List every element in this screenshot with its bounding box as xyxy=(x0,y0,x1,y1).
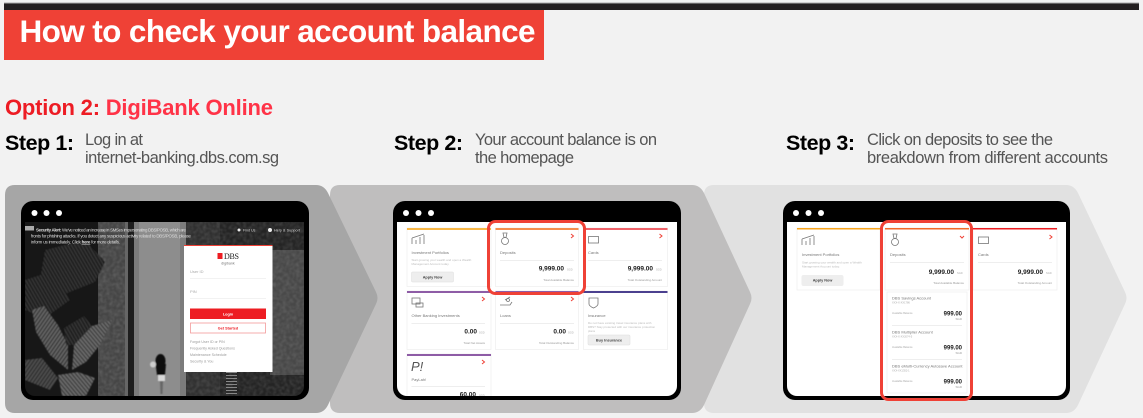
card: cards xyxy=(973,228,1057,290)
card: deposits: Deposits xyxy=(500,250,516,255)
card: deposits: 9,999.00 xyxy=(929,269,954,276)
card: loans: 0.00 xyxy=(553,328,566,336)
account: savings: SGD xyxy=(955,317,963,321)
security alert text: inform us immediately. Click here for more details. xyxy=(31,240,120,244)
step 1 label and text xyxy=(5,131,279,167)
card: deposits: Total Available Balance xyxy=(933,281,964,285)
login card: DBS xyxy=(224,252,239,261)
login card: Forgot User ID or PIN xyxy=(190,340,225,344)
card: paylah: P! xyxy=(411,359,424,374)
device 2: homepage xyxy=(393,201,681,404)
account: multi-currency: 999.00 xyxy=(944,380,963,386)
step 3 label and text: breakdown from different accounts xyxy=(867,149,1108,167)
card: insurance xyxy=(584,291,668,350)
step 1 label and text: internet-banking.dbs.com.sg xyxy=(85,149,279,167)
security alert text: Help & Support xyxy=(274,228,300,232)
highlight: deposits xyxy=(488,222,584,294)
account: multiplier: XXX-X-XX2074-5 xyxy=(892,334,913,338)
account: multiplier: DBS Multiplier Account xyxy=(892,330,934,334)
account: savings: DBS Savings Account xyxy=(892,296,932,300)
card: deposits xyxy=(885,228,969,290)
card: cards: Cards xyxy=(978,252,989,257)
card: deposits xyxy=(496,228,578,286)
card: cards: Cards xyxy=(588,250,599,255)
card: insurance: Insurance xyxy=(588,313,606,318)
card: other banking investments: 0.00 xyxy=(464,328,477,336)
card: investment portfolios: Investment Portfolios xyxy=(412,250,449,255)
screen xyxy=(397,222,677,396)
card: insurance: Do not have existing travel insurance plans with xyxy=(588,321,652,325)
step 1 label and text: Step 1: xyxy=(5,131,74,155)
account: savings: Available Balance xyxy=(892,311,913,315)
card: investment portfolios: Investment Portfolios xyxy=(802,252,839,257)
account: savings: 999.00 xyxy=(944,312,963,318)
account: multi-currency xyxy=(892,365,962,388)
card: loans: SGD xyxy=(568,330,574,334)
card: paylah xyxy=(406,354,492,396)
login card: Get Started xyxy=(218,326,239,330)
device 1: login screen xyxy=(21,201,309,400)
account: multiplier: Available Balance xyxy=(892,345,913,349)
arrow panel 1 xyxy=(5,185,378,413)
device 3: deposits breakdown xyxy=(783,201,1070,400)
account: multi-currency: XXX-XX1352-1 xyxy=(892,368,910,372)
login card: Frequently Asked Questions xyxy=(190,346,235,350)
card: investment portfolios xyxy=(407,228,491,286)
card: cards: 9,999.00 xyxy=(628,266,653,272)
security alert text: fronts for phishing attacks. If you detect any suspicious activity related to DBS/POSB, please xyxy=(31,234,192,238)
account: multi-currency: DBS eMulti-Currency Autosave Account xyxy=(892,364,963,368)
card: investment portfolios xyxy=(797,228,880,290)
login card: Login xyxy=(223,312,234,316)
card: other banking investments: Other Banking Investments xyxy=(412,313,460,318)
card: paylah: 60.00 xyxy=(460,392,476,398)
card: cards: Total Outstanding Amount xyxy=(1018,281,1052,285)
account: multiplier: SGD xyxy=(955,351,963,355)
card: insurance: DBS? Stay protected with our insurance protection xyxy=(588,325,656,329)
arrow panel 3 xyxy=(704,185,1126,413)
login card: digibank xyxy=(221,262,235,266)
step 3 label and text: Click on deposits to see the xyxy=(867,131,1053,149)
card: investment portfolios: Apply Now xyxy=(423,276,442,280)
account: multi-currency: Available Balance xyxy=(892,379,913,383)
palm leaves xyxy=(40,240,105,296)
account: multi-currency: SGD xyxy=(955,385,963,389)
card: other banking investments xyxy=(407,291,491,350)
card: cards xyxy=(584,228,668,286)
card: investment portfolios: Management Account today. xyxy=(802,264,840,268)
card: cards: SGD xyxy=(1046,271,1052,275)
step 2 label and text: Your account balance is on xyxy=(475,131,657,149)
window dots xyxy=(403,210,434,216)
heading: option 2: Option 2: DigiBank Online xyxy=(5,95,273,120)
window dots xyxy=(32,210,62,216)
card: deposits: Total Available Balance xyxy=(543,278,574,282)
card: loans: Total Outstanding Balance xyxy=(539,341,574,345)
card: loans xyxy=(496,291,578,350)
security alert text xyxy=(25,226,300,244)
card: insurance: Buy Insurance xyxy=(596,338,622,342)
screen xyxy=(787,222,1066,396)
account: multiplier xyxy=(892,330,963,360)
card: loans: Loans xyxy=(500,313,511,318)
panel: account breakdown xyxy=(887,292,967,393)
card: investment portfolios: Start growing your wealth and open a Wealth xyxy=(802,260,862,264)
login card xyxy=(184,245,272,372)
card: paylah: SGD xyxy=(479,394,485,398)
login card: PIN xyxy=(190,289,197,294)
arrow panel 2 xyxy=(330,185,752,413)
card: cards: SGD xyxy=(656,268,662,272)
account: savings: XXX-X-XX1786 xyxy=(892,300,910,304)
card: investment portfolios: Management Account today. xyxy=(412,262,449,266)
card: other banking investments: Total Net Assets xyxy=(463,341,485,345)
highlight: deposits breakdown xyxy=(882,222,972,400)
card: investment portfolios: Apply Now xyxy=(813,278,832,282)
step 3 label and text xyxy=(786,131,1108,167)
login card: User ID xyxy=(190,269,204,274)
background photo xyxy=(25,222,304,396)
title banner: How to check your account balance xyxy=(20,13,536,49)
card: cards: 9,999.00 xyxy=(1018,269,1043,276)
login card: Security & You xyxy=(190,360,213,364)
card: deposits: Deposits xyxy=(890,252,906,257)
top rule xyxy=(4,2,1139,10)
title banner xyxy=(4,10,544,60)
walking person xyxy=(156,354,166,368)
step 2 label and text: the homepage xyxy=(475,149,574,167)
step 2 label and text xyxy=(394,131,657,167)
card: insurance: plans xyxy=(588,329,596,333)
card: paylah: PayLah! xyxy=(412,377,426,382)
card: investment portfolios: Start growing your wealth and open a Wealth xyxy=(412,258,472,262)
card: deposits: 9,999.00 xyxy=(539,266,564,272)
card: deposits: SGD xyxy=(567,268,573,272)
step 2 label and text: Step 2: xyxy=(394,131,463,155)
window dots xyxy=(793,210,824,216)
card: cards: Total Outstanding Amount xyxy=(628,278,662,282)
security alert text: Security Alert: We've noticed an increase in SMSes impersonating DBS/POSB, which are xyxy=(36,228,187,232)
step 1 label and text: Log in at xyxy=(85,131,143,149)
account: multiplier: 999.00 xyxy=(944,346,963,352)
card: deposits: SGD xyxy=(957,271,963,275)
step 3 label and text: Step 3: xyxy=(786,131,855,155)
login card: Maintenance Schedule xyxy=(190,353,227,357)
security alert text: Find Us xyxy=(243,228,256,232)
card: other banking investments: SGD xyxy=(479,330,485,334)
account: savings xyxy=(892,296,963,326)
